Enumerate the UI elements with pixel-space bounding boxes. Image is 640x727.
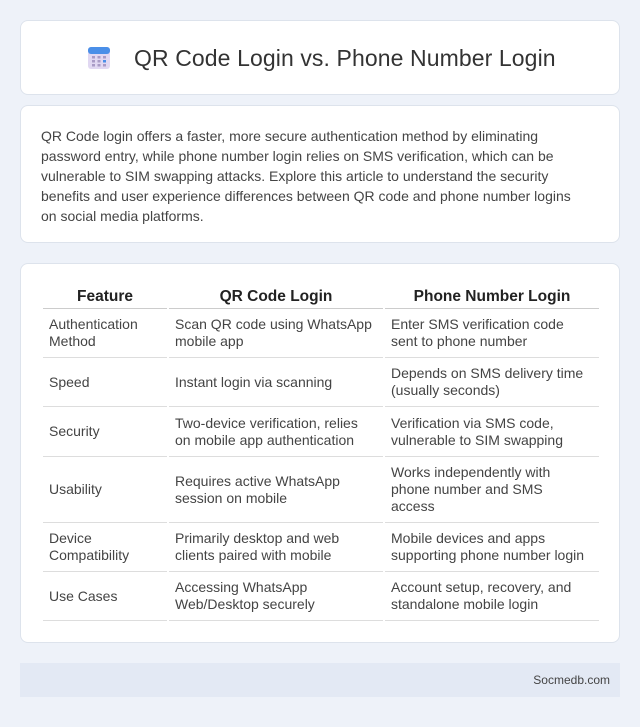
comparison table panel: Device Compatibility <box>49 530 129 563</box>
comparison table panel <box>20 263 620 643</box>
comparison table panel: Phone Number Login <box>414 288 570 305</box>
comparison table panel: Verification via SMS code, vulnerable to SIM swapping <box>391 414 563 448</box>
comparison table panel: Feature <box>77 288 133 305</box>
comparison table panel: Account setup, recovery, and standalone mobile login <box>391 579 571 612</box>
title card <box>20 20 620 95</box>
comparison table panel: Enter SMS verification code sent to phone number <box>391 316 564 349</box>
comparison table panel: Authentication Method <box>49 316 138 349</box>
comparison table panel: Instant login via scanning <box>175 374 332 390</box>
comparison table panel: Usability <box>49 481 102 497</box>
comparison table panel: Two-device verification, relies on mobile app authentication <box>175 414 358 448</box>
footer <box>20 663 620 697</box>
comparison table panel: Primarily desktop and web clients paired with mobile <box>175 530 339 563</box>
comparison table panel: Accessing WhatsApp Web/Desktop securely <box>175 579 315 612</box>
comparison table panel: Mobile devices and apps supporting phone number login <box>391 530 584 563</box>
intro text panel <box>20 105 620 243</box>
comparison table panel: Use Cases <box>49 588 117 604</box>
comparison table panel: Requires active WhatsApp session on mobile <box>175 472 340 506</box>
comparison table panel: Scan QR code using WhatsApp mobile app <box>175 316 372 349</box>
comparison table panel: Works independently with phone number and SMS access <box>391 464 550 514</box>
footer: Socmedb.com <box>533 673 610 687</box>
comparison table panel: Speed <box>49 374 89 390</box>
intro text panel: QR Code login offers a faster, more secure authentication method by eliminating password entry, while phone number login relies on SMS verification, which can be vulnerable to SIM swapping attacks. Explore this article to understand the security benefits and user experience differences between QR code and phone number logins on social media platforms. <box>41 128 571 224</box>
comparison table panel: Security <box>49 423 100 439</box>
title: QR Code Login vs. Phone Number Login <box>134 45 556 71</box>
comparison table panel: Depends on SMS delivery time (usually seconds) <box>391 365 583 398</box>
comparison table panel: QR Code Login <box>220 288 332 305</box>
icon: calendar <box>88 47 110 69</box>
